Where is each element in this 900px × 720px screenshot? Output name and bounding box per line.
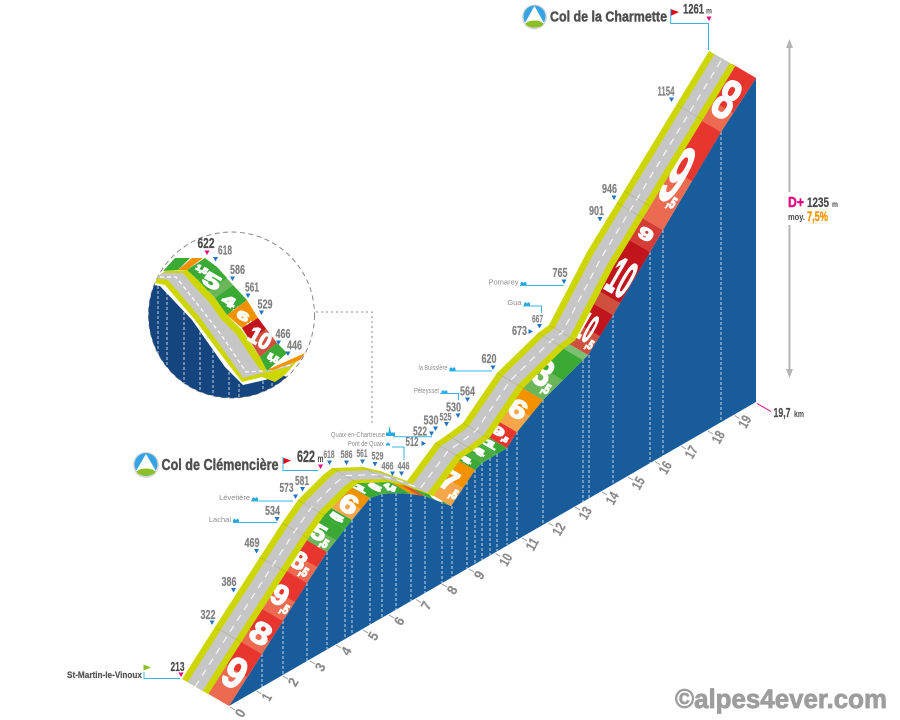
place label: Lachal [209,515,277,524]
segment: 6 percent steep: 6 [503,392,533,426]
altitude markers: second climb: 901 [589,203,604,218]
inset altitude labels: 529 [258,296,272,312]
place label: la Buisslère [418,363,492,372]
inset altitude labels: 586 [230,262,245,277]
altitude markers: second climb [406,84,675,449]
altitude markers: second climb: 512 [406,434,418,449]
segment: descent green: 5 [430,493,444,505]
segment: 3,5 percent: 3 [525,351,561,396]
place label: Lévetière: Lévetière [219,493,250,502]
altitude markers: second climb: 522 [413,424,427,438]
segment: 9 percent upper: 9 [635,222,657,246]
altitude markers: col crossing: 466 [382,460,394,472]
altitude markers: col crossing [324,448,410,476]
total distance: 19,7 km [757,404,804,420]
altitude markers: col crossing: 561 [356,448,368,460]
inset segment: 4,5 [215,285,247,315]
segment: 8,5 percent: 8 [285,545,312,577]
segment: 10,5 percent [564,301,613,355]
summit label: Col de la Charmette 1261 m [522,0,712,50]
summit label: Col de Clémencière 622 m [133,447,324,478]
segment: 8 percent top: 8 [701,67,752,133]
segment: flat top green 1 [346,480,382,498]
segment: thin green after dip 1: 4 [458,454,472,466]
segment: 7,5 percent [427,456,475,506]
segment: 5,5 percent: 5 [306,518,331,547]
kilometre axis labels: 16 [655,458,675,477]
kilometre axis labels: 3 [311,660,329,674]
altitude markers: second climb: 765 [552,265,568,280]
kilometre axis labels: 14 [602,489,622,507]
kilometre axis labels: 13 [575,504,595,522]
segment: flat top green 3 [372,479,411,494]
summit label: Col de la Charmette 1261 m: 1261 [683,0,704,16]
climb stats: D+ 1235 m, moy. 7,5%: 7,5% [807,208,828,224]
altitude markers: second climb: 530 [446,400,461,414]
segment: descent green [401,482,451,506]
segment: 7,5 percent: ,5 [447,485,461,502]
altitude markers: col crossing: 529 [372,450,384,462]
inset altitude labels: 618 [218,242,232,258]
kilometre axis labels: 7 [417,598,435,613]
segment: 8 percent [238,607,283,654]
total distance: 19,7 km: km [794,409,804,419]
profile wall: blue elevation area [229,78,756,706]
segment: 8,5 percent: ,5 [297,563,311,580]
altitude markers: first climb: 386 [222,574,236,589]
segment: descent orange and red [387,480,425,496]
altitude markers: col crossing: 446 [398,460,410,472]
summit label: Col de la Charmette 1261 m: Col de la Charmette [550,8,667,26]
segment: thin green top [559,341,588,360]
inset altitude labels: 561 [245,280,259,294]
altitude markers: col crossing: 618 [324,449,334,461]
kilometre axis labels: 0 [231,706,249,720]
kilometre axis labels: 15 [628,474,648,492]
inset altitude labels: 466 [276,326,290,341]
inset altitude labels [198,235,302,356]
place label: Lachal: Lachal [209,515,231,524]
place label: la Buisslère: la Buisslère [418,363,448,372]
altitude markers: second climb: 564 [460,384,476,398]
segment: thin green after dip 2: 4 [470,443,486,459]
segment: 5,5 percent: ,5 [317,535,331,551]
inset connector [316,312,372,425]
place label: Pont de Quaix: Pont de Quaix [348,439,384,448]
place label: Lévetière [219,493,293,502]
summit label: Col de la Charmette 1261 m: m [706,6,712,16]
kilometre axis labels [230,412,755,720]
segment: 9,5 percent: 9 [265,578,294,614]
segment: 9,5 percent upper: ,5 [664,194,679,213]
place label: Gua: Gua [507,298,522,307]
altitude markers: first climb: 573 [280,480,294,495]
altitude markers: first climb: 322 [200,607,216,622]
inset segment: 10: 10 [244,321,276,355]
kilometre axis labels: 4 [337,644,355,658]
segment: thin green [321,506,352,529]
inset segment: 5,5 [260,343,287,371]
altitude markers: second climb: 1154 [658,84,675,98]
segment: 9,5 percent upper: 9 [646,129,709,220]
segment: flat top green 1: 1 [353,483,367,495]
segment: 9,5 percent short [483,418,517,448]
place label: Péteysset [414,386,458,400]
inset: zoom on the Col de Clémencière [148,232,315,398]
climb stats: D+ 1235 m, moy. 7,5%: D+ [788,194,804,211]
segment: 10 percent: 10 [597,247,646,310]
gradient strip: coloured slope segments [205,64,756,706]
climb stats: D+ 1235 m, moy. 7,5%: moy. [788,212,805,222]
segment: 6 percent: 6 [334,487,364,521]
segment: flat top green 2: 5 [368,482,382,494]
start marker: St-Martin-le-Vinoux 213: 213 [170,659,184,674]
kilometre axis labels: 19 [735,412,755,431]
segment: thin green after dip 3 [473,434,507,454]
place label: Quaix-en-Chartreuse: Quaix-en-Chartreuse [331,430,385,439]
total distance: 19,7 km: 19,7 [774,405,790,420]
segment: 9,5 percent [259,569,307,621]
kilometre axis labels: 6 [390,614,408,628]
place label: Pont de Quaix [348,439,404,460]
kilometre axis labels: 18 [708,428,728,446]
segment: 10,5 percent: ,5 [583,336,597,352]
kilometre axis labels: 12 [549,520,569,538]
place label: Péteysset: Péteysset [414,386,440,395]
summit label: Col de Clémencière 622 m: m [318,454,324,465]
segment: 9 percent upper [626,216,663,252]
segment: 5,5 percent [303,515,345,552]
inset profile clipped to the circle [148,258,305,398]
inset segment: 5 [198,267,233,298]
inset altitude labels: 446 [287,338,302,352]
inset segment: 5,5: 5,5 [266,351,280,365]
altitude markers: second climb: 530 [424,412,438,428]
place label: Pomarey [488,278,564,286]
kilometre axis labels: 8 [443,583,461,597]
inset segment: short green: 1,5 [194,263,210,277]
segment: thin green after dip 3: 1 [482,436,498,452]
place label: Gua [507,298,542,313]
climb stats: D+ 1235 m, moy. 7,5%: m [832,200,838,209]
kilometre axis labels: 17 [681,443,701,461]
segment: 9,5 percent short: 9 [489,422,508,441]
segment: 9 percent: 9 [213,647,256,700]
inset segment: 6,5 [227,300,258,329]
total climb arrow [786,39,793,378]
kilometre axis labels: 9 [470,568,488,582]
inset segment: 4,5: 4 [219,291,239,311]
segment: 3,5 percent: ,5 [539,379,554,397]
inset segment: short green [187,258,217,280]
road: yellow verges, grey lane, dashed centre line [182,51,735,694]
altitude markers: second climb: 946 [602,181,617,196]
kilometre axis labels: 11 [522,535,542,553]
altitude markers: col crossing: 586 [340,449,352,461]
altitude markers: second climb: 667 [532,314,543,326]
inset segment: 4,5: ,5 [232,306,241,315]
altitude markers: second climb: 525 [440,412,452,424]
place label: Quaix-en-Chartreuse [331,426,432,439]
kilometre axis labels: 10 [496,550,516,569]
watermark: alpes4ever.com: ©alpes4ever.com [675,684,887,714]
segment: thin green: 5 [329,510,346,525]
inset altitude labels: 622 [198,235,214,252]
altitude markers: first climb [200,473,309,625]
start marker: St-Martin-le-Vinoux 213: St-Martin-le-Vinoux [67,670,142,680]
segment: 9,5 percent: ,5 [278,600,292,617]
segment: flat top green 2 [358,479,396,494]
segment: 9,5 percent short: ,5 [500,435,509,444]
summit label: Col de Clémencière 622 m: Col de Clémencière [162,457,279,474]
segment: 8,5 percent [283,538,327,583]
segment: thin green after dip 1 [451,449,482,470]
start marker: St-Martin-le-Vinoux 213 [67,659,184,680]
altitude markers: first climb: 581 [295,473,309,488]
inset segment: 6,5: ,5 [246,321,254,329]
kilometre axis labels: 2 [284,675,302,689]
segment: thin green after dip 2 [458,440,497,463]
segment: flat top green 3: 4,5 [383,482,397,494]
segment: 8 percent: 8 [243,613,278,654]
segment: 10,5 percent: 10 [568,305,605,351]
inset segment: 6,5: 6 [234,307,252,325]
inset segment: 5: 5 [198,268,225,296]
segment: 10 percent [589,238,650,315]
segment: 3,5 percent [519,346,583,400]
climb stats: D+ 1235 m, moy. 7,5% [788,194,838,224]
place label: Pomarey: Pomarey [488,278,519,286]
altitude markers: second climb: 673 [512,323,527,338]
altitude markers: second climb: 620 [482,351,496,366]
altitude markers: first climb: 534 [265,503,281,518]
kilometre axis labels: 5 [364,629,382,643]
climb stats: D+ 1235 m, moy. 7,5%: 1235 [807,194,829,210]
segment: 7,5 percent: 7 [433,463,464,499]
segment: 6 percent steep [493,386,543,432]
segment: 9 percent [205,640,262,706]
altitude markers: first climb: 469 [244,535,260,550]
kilometre axis labels: 1 [258,690,275,704]
segment: 6 percent [328,484,370,521]
summit label: Col de Clémencière 622 m: 622 [297,447,315,466]
